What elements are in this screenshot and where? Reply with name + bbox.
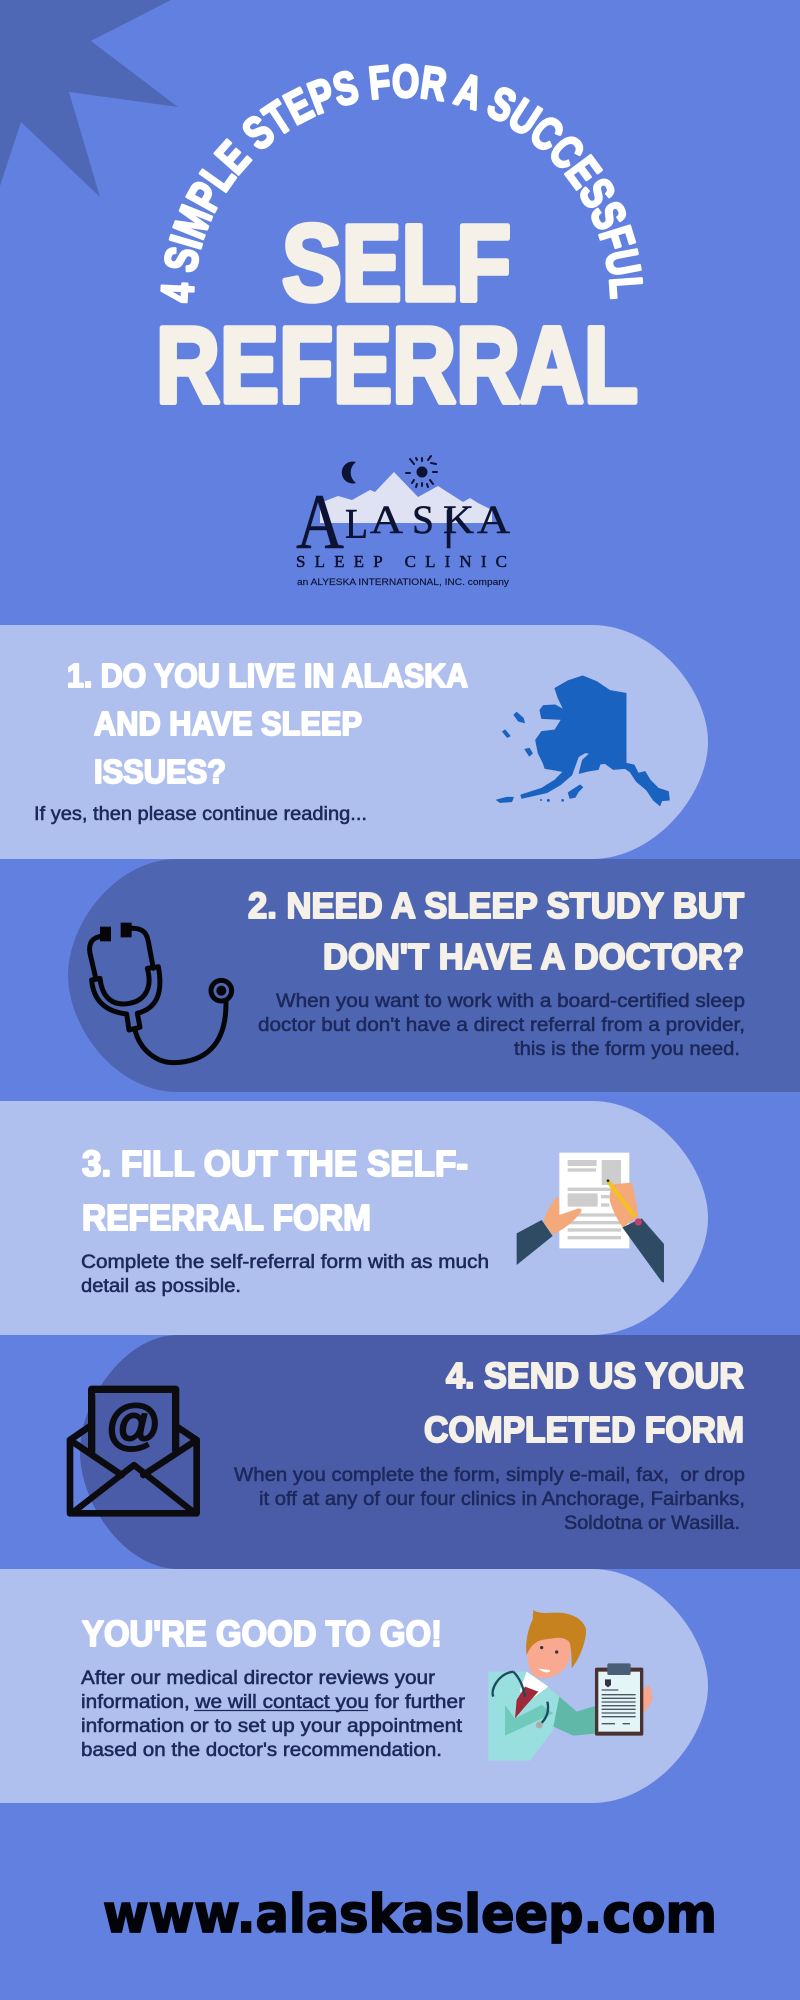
heading: step 4: 4. SEND US YOUR [446,1355,744,1396]
text: step 2 body: this is the form you need. [514,1039,740,1060]
icon: envelope with at sign: @ [107,1393,160,1455]
text: final step body: After our medical director reviews your [81,1668,436,1689]
text: final step body: based on the doctor's recommendation. [81,1740,442,1761]
icon: hands filling out form [517,1153,664,1283]
heading: step 2: DON'T HAVE A DOCTOR? [323,936,744,977]
heading: step 1 [67,657,468,790]
text: final step body: information or to set up your appointment [81,1716,463,1737]
icon: corner starburst [0,0,178,197]
heading: step 3 [82,1143,468,1238]
text: final step body: information, we will contact you for further [81,1692,466,1713]
logo wordmark: SLEEP CLINIC [296,552,507,571]
panel: step 4 [70,1335,800,1569]
title [156,202,638,425]
heading: step 1: 1. DO YOU LIVE IN ALASKA [67,657,468,694]
title: REFERRAL [156,304,638,425]
text: step 3 body: Complete the self-referral form with as much [81,1252,489,1273]
logo: Alaska Sleep Clinic [296,456,510,587]
curved subtitle: 4 SIMPLE STEPS FOR A SUCCESSFUL [160,64,644,304]
text: final step body [81,1668,466,1761]
icon: logo mountains [320,472,492,523]
icon: moon [342,462,356,484]
icon: map of Alaska [497,676,669,806]
text: step 4 body: When you complete the form, simply e-mail, fax, or drop [234,1465,745,1486]
heading: step 1: ISSUES? [94,753,226,790]
text: step 2 body [258,991,745,1060]
heading: step 2 [248,885,744,977]
panel: step 3 [0,1101,708,1335]
logo wordmark: K [443,497,474,542]
website url: www.alaskasleep.com [103,1884,717,1945]
text: step 4 body: Soldotna or Wasilla. [564,1513,740,1534]
title: SELF [282,202,511,323]
logo wordmark: L [345,502,368,548]
heading: step 2: 2. NEED A SLEEP STUDY BUT [248,885,744,926]
panel: final step [0,1569,708,1803]
icon: doctor with clipboard [488,1610,653,1761]
heading: step 4: COMPLETED FORM [424,1409,744,1450]
text: step 1 body: If yes, then please continue reading... [34,804,367,825]
icon: stethoscope [90,923,232,1063]
heading: step 4 [424,1355,744,1450]
heading: step 3: 3. FILL OUT THE SELF- [82,1143,468,1184]
text: step 4 body: it off at any of our four clinics in Anchorage, Fairbanks, [259,1489,745,1510]
logo wordmark: A [370,497,403,542]
icon: envelope with at sign [70,1389,197,1513]
text: step 2 body: When you want to work with a board-certified sleep [276,991,745,1012]
logo tagline: an ALYESKA INTERNATIONAL, INC. company [297,577,510,587]
icon: sun [406,456,437,487]
text: step 2 body: doctor but don't have a direct referral from a provider, [258,1015,745,1036]
text: step 3 body [81,1252,489,1297]
text: step 4 body [234,1465,745,1534]
logo wordmark: S [412,497,434,542]
text: step 3 body: detail as possible. [81,1276,241,1297]
panel: step 1 [0,625,708,859]
panel: step 2 [68,859,800,1092]
heading: step 1: AND HAVE SLEEP [94,705,362,742]
logo wordmark: A [296,478,344,565]
heading: good to go: YOU'RE GOOD TO GO! [82,1613,442,1654]
logo wordmark: A [477,497,510,542]
heading: step 3: REFERRAL FORM [82,1197,371,1238]
logo wordmark [296,478,510,571]
